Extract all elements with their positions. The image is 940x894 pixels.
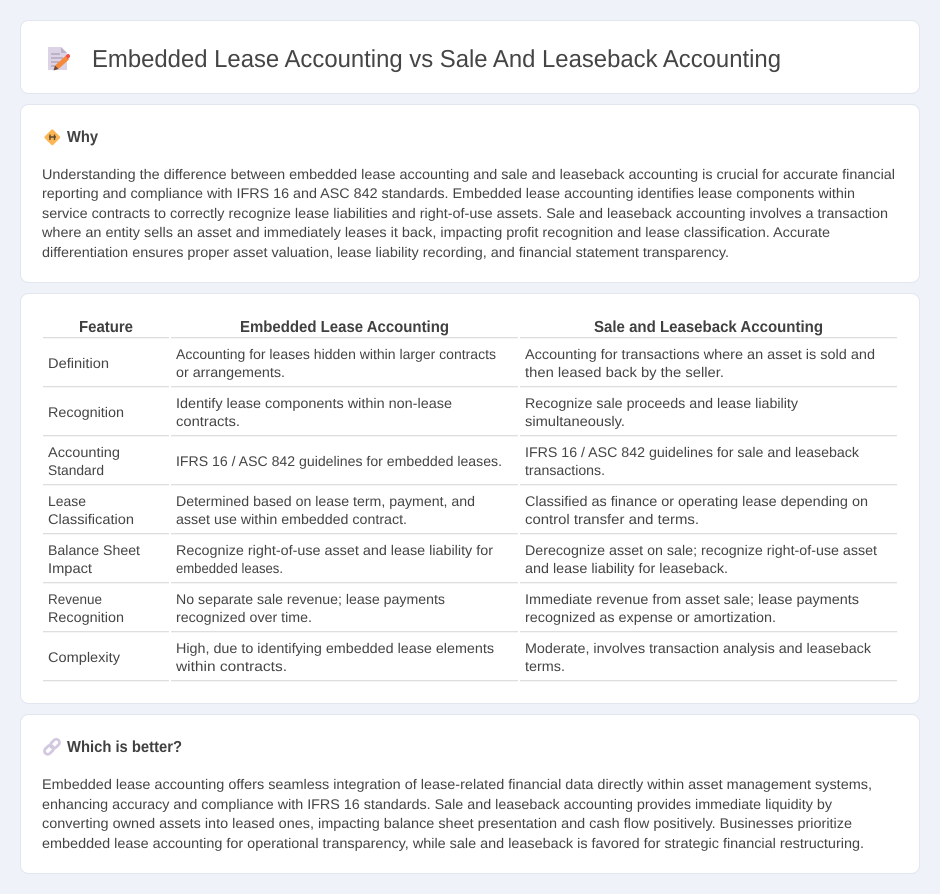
- which is better paragraph: Embedded lease accounting offers seamless integration of lease-related financial data directly within asset management systems,: [42, 776, 872, 792]
- why paragraph: where an entity sells an asset and immediately leases it back, impacting profit recognition and lease classification. Accurate: [41, 224, 830, 240]
- row: complexity: [48, 640, 872, 674]
- row: accounting standard: IFRS 16 / ASC 842 guidelines for sale and leaseback: [525, 444, 860, 460]
- table header row: Embedded Lease Accounting: [240, 319, 449, 336]
- row: lease classification: Lease: [48, 493, 86, 509]
- row: balance sheet impact: Recognize right-of-use asset and lease liability for: [176, 542, 493, 558]
- panel: which is better: [20, 714, 920, 874]
- row: recognition: Recognition: [48, 404, 124, 420]
- row: lease classification: Determined based on lease term, payment, and: [176, 493, 475, 509]
- heading: which is better: Which is better?: [67, 739, 182, 756]
- row: lease classification: control transfer and terms.: [525, 511, 699, 527]
- row: balance sheet impact: Impact: [48, 560, 92, 576]
- row: accounting standard: Accounting: [48, 444, 120, 460]
- which is better paragraph: [42, 776, 872, 851]
- title: Embedded Lease Accounting vs Sale And Leaseback Accounting: [92, 46, 781, 73]
- row: recognition: contracts.: [176, 413, 240, 429]
- why paragraph: differentiation ensures proper asset valuation, lease liability recording, and financial statement transparency.: [42, 244, 729, 260]
- table header row: [79, 319, 823, 336]
- row: definition: or arrangements.: [176, 364, 285, 380]
- row: revenue recognition: No separate sale revenue; lease payments: [176, 591, 445, 607]
- row: balance sheet impact: embedded leases.: [176, 560, 283, 576]
- panel: comparison table: [20, 294, 920, 704]
- row: revenue recognition: Immediate revenue from asset sale; lease payments: [525, 591, 859, 607]
- row: accounting standard: transactions.: [525, 462, 605, 478]
- why paragraph: reporting and compliance with IFRS 16 and ASC 842 standards. Embedded lease accounting identifies lease components within: [42, 185, 855, 201]
- row: lease classification: Classified as finance or operating lease depending on: [525, 493, 868, 509]
- table header row: Feature: [79, 319, 133, 336]
- which is better paragraph: embedded lease accounting for operational transparency, while sale and leaseback is favored for strategic financial restructuring.: [42, 835, 864, 851]
- row: revenue recognition: Revenue: [48, 591, 102, 607]
- row: lease classification: asset use within embedded contract.: [176, 511, 407, 527]
- row: accounting standard: Standard: [48, 462, 104, 478]
- why paragraph: [41, 166, 895, 260]
- row: definition: then leased back by the seller.: [525, 364, 724, 380]
- row: revenue recognition: recognized as expense or amortization.: [525, 609, 776, 625]
- row: accounting standard: [48, 444, 860, 478]
- row: revenue recognition: Recognition: [48, 609, 124, 625]
- row: recognition: Recognize sale proceeds and lease liability: [525, 395, 798, 411]
- row: complexity: Complexity: [48, 649, 120, 665]
- row: definition: Definition: [48, 355, 109, 371]
- row: complexity: within contracts.: [175, 658, 287, 674]
- row: definition: [48, 346, 875, 380]
- panel: title header: [20, 20, 920, 94]
- which is better paragraph: converting owned assets into leased ones, impacting balance sheet presentation and cash flow positively. Businesses prioritize: [42, 815, 852, 831]
- row: complexity: High, due to identifying embedded lease elements: [176, 640, 494, 656]
- why paragraph: service contracts to correctly recognize lease liabilities and right-of-use assets. Sale and leaseback accounting involves a transaction: [42, 205, 888, 221]
- icon: chain link: [43, 738, 61, 756]
- panel: why: [20, 104, 920, 282]
- icon: document with pencil: [48, 47, 70, 70]
- row: balance sheet impact: [48, 542, 877, 576]
- row: lease classification: Classification: [48, 511, 134, 527]
- why paragraph: Understanding the difference between embedded lease accounting and sale and leaseback accounting is crucial for accurate financial: [42, 166, 895, 182]
- row: recognition: Identify lease components within non-lease: [176, 395, 452, 411]
- row: complexity: Moderate, involves transaction analysis and leaseback: [525, 640, 872, 656]
- row: accounting standard: IFRS 16 / ASC 842 guidelines for embedded leases.: [176, 453, 502, 469]
- icon: warning diamond: [44, 129, 61, 146]
- row: recognition: simultaneously.: [525, 413, 625, 429]
- row: balance sheet impact: and lease liability for leaseback.: [525, 560, 728, 576]
- row: complexity: terms.: [525, 658, 565, 674]
- which is better paragraph: enhancing accuracy and compliance with IFRS 16 standards. Sale and leaseback accounting provides immediate liquidity by: [42, 796, 832, 812]
- row: lease classification: [48, 493, 868, 527]
- row: balance sheet impact: Derecognize asset on sale; recognize right-of-use asset: [525, 542, 877, 558]
- row: revenue recognition: recognized over time.: [176, 609, 312, 625]
- row: definition: Accounting for leases hidden within larger contracts: [176, 346, 496, 362]
- row: recognition: [48, 395, 798, 429]
- table header row: Sale and Leaseback Accounting: [594, 319, 823, 336]
- heading: why: Why: [67, 129, 98, 146]
- row: revenue recognition: [48, 591, 859, 625]
- row: definition: Accounting for transactions where an asset is sold and: [525, 346, 875, 362]
- row: balance sheet impact: Balance Sheet: [48, 542, 140, 558]
